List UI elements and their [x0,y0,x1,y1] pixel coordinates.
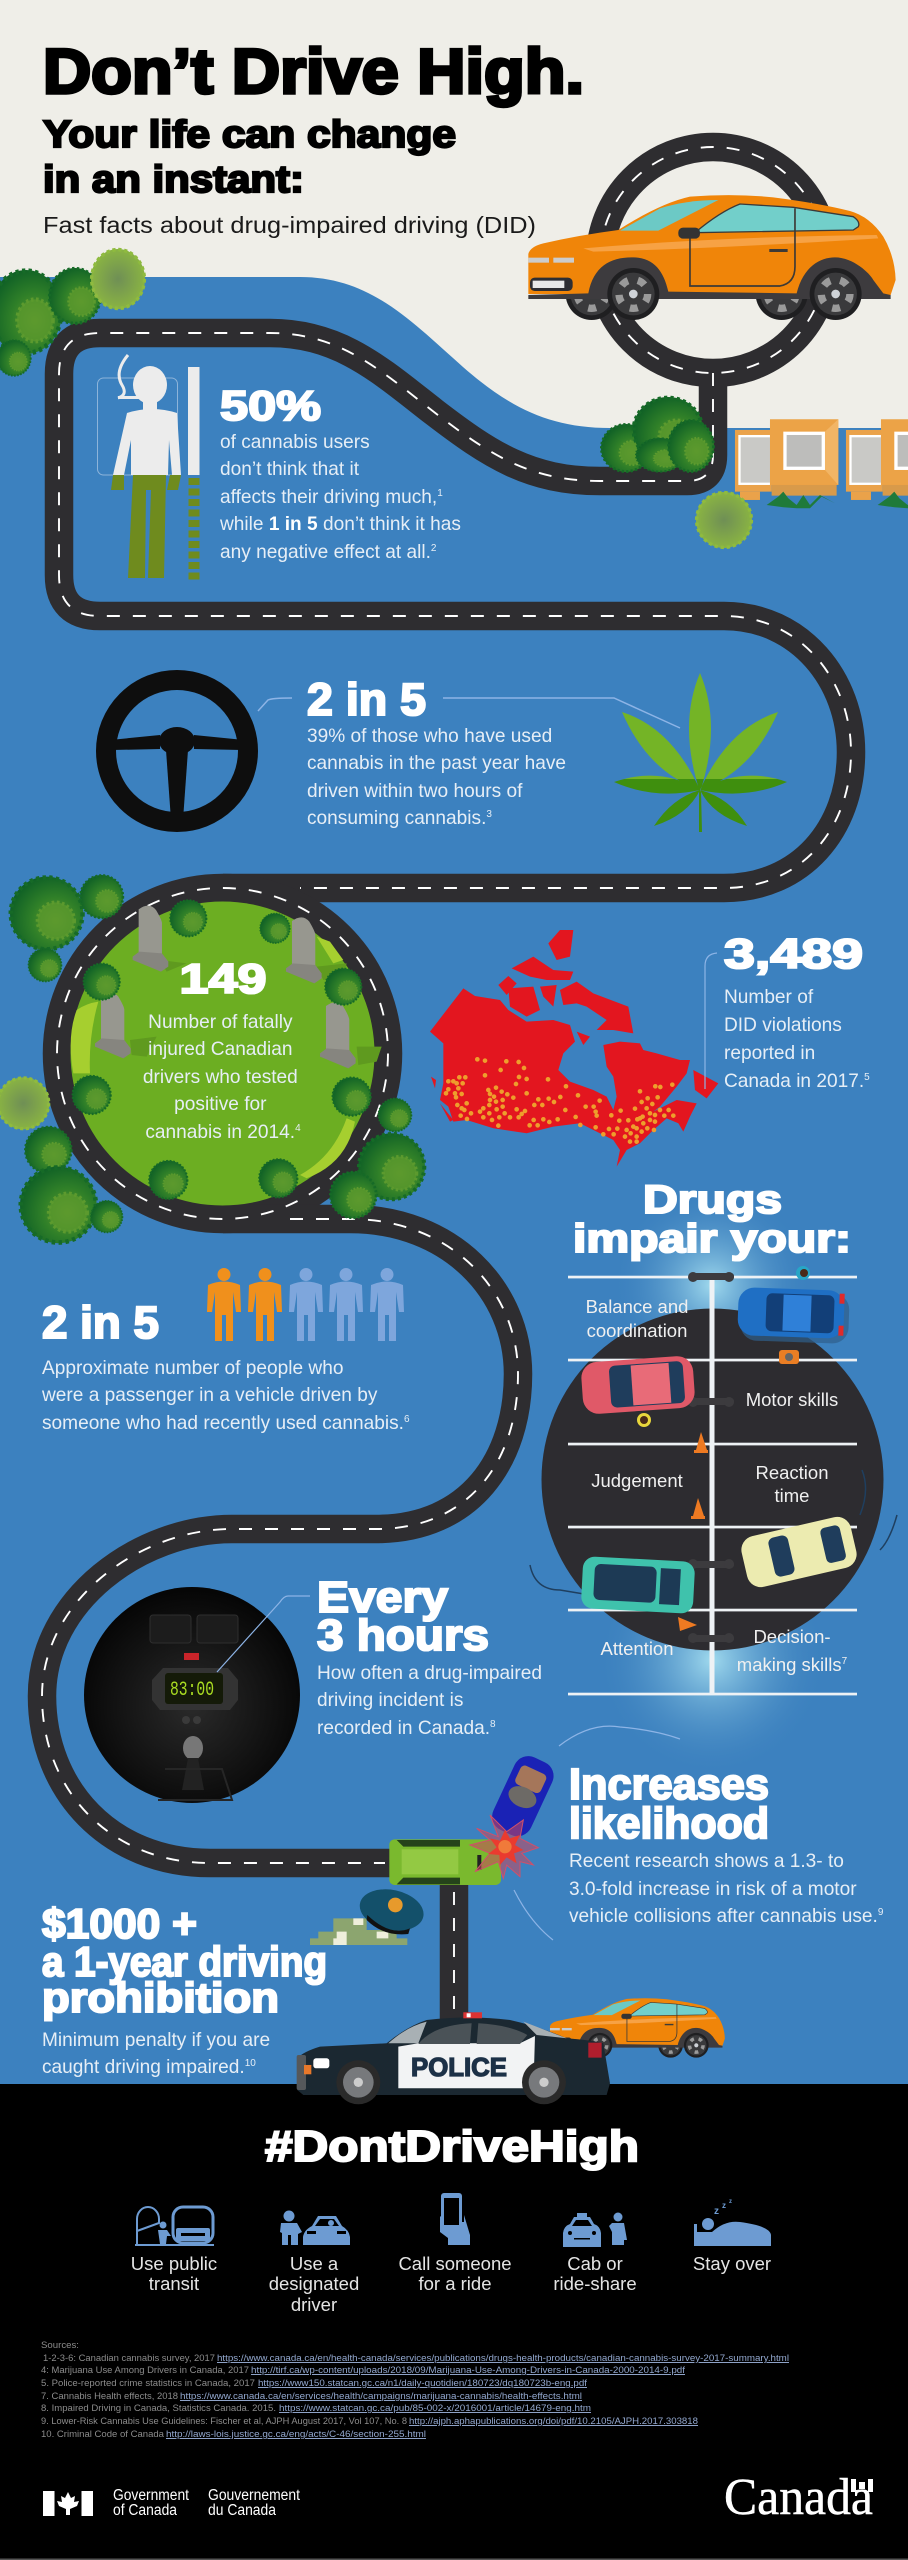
heading: drugs impair your: impair your: [573,1217,851,1261]
sources: http://tirf.ca/wp-content/uploads/2018/09/Marijuana-Use-Among-Drivers-in-Canada-2000-2014-9.pdf [251,2365,685,2376]
labels: alternatives: Use public [131,2253,217,2274]
text: past year: 3 [486,809,492,820]
icon: public transit [135,2207,214,2246]
icon: stay over [694,2199,771,2246]
sources: https://www.statcan.gc.ca/pub/85-002-x/2016001/article/14679-eng.htm [279,2403,591,2414]
stat: penalty: prohibition [42,1974,279,2021]
text: recent research: vehicle collisions after cannabis use. [569,1906,884,1927]
text: DID violations: Canada in 2017. [724,1071,870,1092]
sources: 9. Lower-Risk Cannabis Use Guidelines: Fischer et al, AJPH August 2017, Vol 107, No. 8 [41,2416,407,2427]
icon: cab [563,2212,627,2247]
bottom edge strip [0,2558,908,2560]
labels: alternatives: Cab or [567,2253,623,2274]
sources: 4: Marijuana Use Among Drivers in Canada, 2017 [41,2365,249,2376]
stat: increases likelihood [569,1760,769,1848]
stat: penalty: a 1-year driving [42,1938,327,1985]
text: fatally injured: positive for [174,1094,267,1115]
text: how often: 8 [490,1719,496,1730]
icon: stay over: z [714,2206,719,2217]
labels: impaired skills: Motor skills [746,1389,838,1410]
stat: every 3 hours [317,1573,489,1660]
illustration: car dashboard: 83:00 [170,1679,214,1702]
trees: near stem [601,397,752,548]
subtitle: Your life can change [43,114,456,156]
sources: https://www150.statcan.gc.ca/n1/daily-quotidien/180723/dq180723b-eng.pdf [258,2378,587,2389]
icon: stay over: z [722,2201,726,2210]
labels: alternatives: designated [269,2273,359,2294]
stat: every 3 hours: Every [317,1573,449,1622]
icon: cannabis leaf [614,673,787,832]
stat: 2 in 5 passengers: 2 in 5 [42,1297,159,1348]
parking lines [568,1276,857,1695]
connector line [217,1596,310,1672]
skid marks [530,1470,897,1595]
text: passengers: Approximate number of people who [42,1358,343,1379]
labels: alternatives: transit [149,2273,199,2294]
labels: impaired skills: making skills [737,1654,842,1675]
car: red [580,1355,696,1415]
car: cream [739,1514,859,1590]
heading: drugs impair your [573,1178,851,1261]
connector lines [258,698,680,728]
text: cannabis users: 2 [431,543,437,554]
text: passengers: were a passenger in a vehicle driven by [41,1385,378,1406]
logo: government of Canada [43,2487,301,2519]
labels: impaired skills: 7 [842,1656,848,1667]
text: past year: 39% of those who have used [307,726,552,747]
illustration: crash [389,1751,558,1885]
houses [735,419,908,508]
cones [678,1432,708,1631]
road network [42,147,851,2030]
sources: https://www.canada.ca/en/health-canada/services/publications/drugs-health-products/canadian-cannabis-survey-2017-summary.html [217,2353,789,2364]
labels: impaired skills: Decision- [753,1626,831,1647]
title: Don’t Drive High. [43,37,584,107]
sources: 7. Cannabis Health effects, 2018 [41,2391,178,2402]
text: passengers: 6 [404,1414,410,1425]
text: cannabis users: affects their driving much, [220,487,443,508]
icon: stay over: z [729,2199,732,2205]
text: cannabis users: 1 [437,488,443,499]
stat: increases likelihood: Increases [569,1760,769,1809]
text: past year: consuming cannabis. [307,808,492,829]
labels: alternatives: driver [291,2294,337,2315]
labels: alternatives: Stay over [693,2253,771,2274]
logo: Canada wordmark: Canada [724,2469,873,2526]
heading: drugs impair your: Drugs [643,1178,782,1222]
text: recent research: 3.0-fold increase in risk of a motor [569,1879,857,1900]
illustration: car dashboard [84,1587,300,1803]
sources: 1-2-3-6: Canadian cannabis survey, 2017 [43,2353,215,2364]
labels: alternatives: for a ride [418,2273,492,2294]
car: teal [581,1556,695,1614]
labels: impaired skills: Reaction [755,1462,829,1483]
sources: https://www.canada.ca/en/services/health/campaigns/marijuana-cannabis/health-effects.html [180,2391,582,2402]
tagline: Fast facts about drug-impaired driving (DID) [43,212,536,238]
stat: 3,489: 3,489 [724,930,863,977]
stat: 50 percent: 50% [220,382,321,429]
icon: smoking figure [98,355,181,578]
labels: impaired skills: Balance and [586,1296,688,1317]
text: fatally injured: Number of fatally [148,1012,293,1033]
connector arcs [514,1726,680,1940]
text: DID violations: 5 [864,1072,870,1083]
labels: alternatives: Use a [290,2253,339,2274]
text: recent research: Recent research shows a 1.3- to [569,1851,844,1872]
icon: call phone [440,2193,470,2245]
stat: every 3 hours: 3 hours [317,1611,489,1660]
text: cannabis users: don’t think that it [220,459,360,480]
labels: alternatives [131,2253,771,2315]
pedestrians [637,1266,810,1427]
sources: 5. Police-reported crime statistics in Canada, 2017 [41,2378,255,2389]
text: fatally injured: injured Canadian [148,1039,293,1060]
sources: Sources: [41,2340,79,2351]
text: how often: How often a drug-impaired [317,1663,542,1684]
text: fatally injured: cannabis in 2014. [145,1122,301,1143]
labels: impaired skills: Judgement [591,1470,683,1491]
panel: parking lot asphalt [542,1308,884,1650]
text: how often: driving incident is [317,1690,463,1711]
text: DID violations: reported in [724,1043,815,1064]
icon: orange car [528,195,896,320]
text: cannabis users: of cannabis users [220,432,370,453]
labels: impaired skills: time [775,1485,809,1506]
icon: small orange car [550,1998,725,2058]
labels: impaired skills: Attention [600,1638,674,1659]
wheel stops [688,1272,734,1643]
text: DID violations: DID violations [724,1015,842,1036]
logo: government of Canada: du Canada [208,2502,276,2519]
hashtag: #DontDriveHigh [265,2122,639,2171]
text: cannabis users: any negative effect at all. [220,542,437,563]
panel: parking lot glow [597,1185,827,1775]
sources [41,2340,789,2440]
logo: government of Canada: Government [113,2487,190,2504]
trees: around cemetery [0,875,425,1243]
illustration: money and police hat [310,1884,427,1945]
map: Canada [430,930,718,1167]
text: how often: recorded in Canada. [317,1718,496,1739]
text: minimum penalty: caught driving impaired. [42,2057,256,2078]
icon: designated driver [280,2210,350,2245]
labels: impaired skills: coordination [587,1320,687,1341]
text: DID violations: Number of [724,987,814,1008]
icon: measure bar [188,367,200,581]
labels: impaired skills [586,1296,848,1675]
police text: POLICE [411,2052,507,2082]
text: passengers: someone who had recently used cannabis. [42,1413,410,1434]
labels: alternatives: ride-share [553,2273,637,2294]
labels: alternatives: Call someone [398,2253,512,2274]
text: cannabis users: while 1 in 5 don’t think it has [220,514,461,535]
subtitle: in an instant: [43,159,304,201]
background: black footer [0,2084,908,2560]
sources: 8. Impaired Driving in Canada, Statistics Canada. 2015. [41,2403,276,2414]
text: minimum penalty: Minimum penalty if you are [42,2030,270,2051]
stat: penalty: $1000 + [42,1900,197,1947]
trees: top left [0,249,145,376]
stat: 2 in 5 drivers: 2 in 5 [307,674,426,725]
sources: 10. Criminal Code of Canada [41,2429,165,2440]
stat: penalty [42,1900,327,2021]
sources: http://laws-lois.justice.gc.ca/eng/acts/C-46/section-255.html [166,2429,426,2440]
background: blue ground [0,277,908,2090]
panel: cemetery circle [70,900,382,1206]
icon: people row [207,1268,404,1341]
text: fatally injured: 4 [295,1123,301,1134]
logo: government of Canada: of Canada [113,2502,177,2519]
stat: 149: 149 [180,955,266,1002]
logo: government of Canada: Gouvernement [208,2487,301,2504]
sources: http://ajph.aphapublications.org/doi/pdf/10.2105/AJPH.2017.303818 [409,2416,698,2427]
icon: steering wheel [106,680,248,822]
car: blue [737,1287,850,1344]
text: past year: driven within two hours of [307,781,523,802]
text: fatally injured: drivers who tested [143,1067,298,1088]
text: past year: cannabis in the past year have [307,753,566,774]
illustration: police car [297,2012,610,2104]
text: minimum penalty: 10 [245,2058,256,2069]
subtitle [43,114,456,201]
stat: increases likelihood: likelihood [569,1799,769,1848]
connector line [705,953,717,1089]
text: recent research: 9 [878,1907,884,1918]
